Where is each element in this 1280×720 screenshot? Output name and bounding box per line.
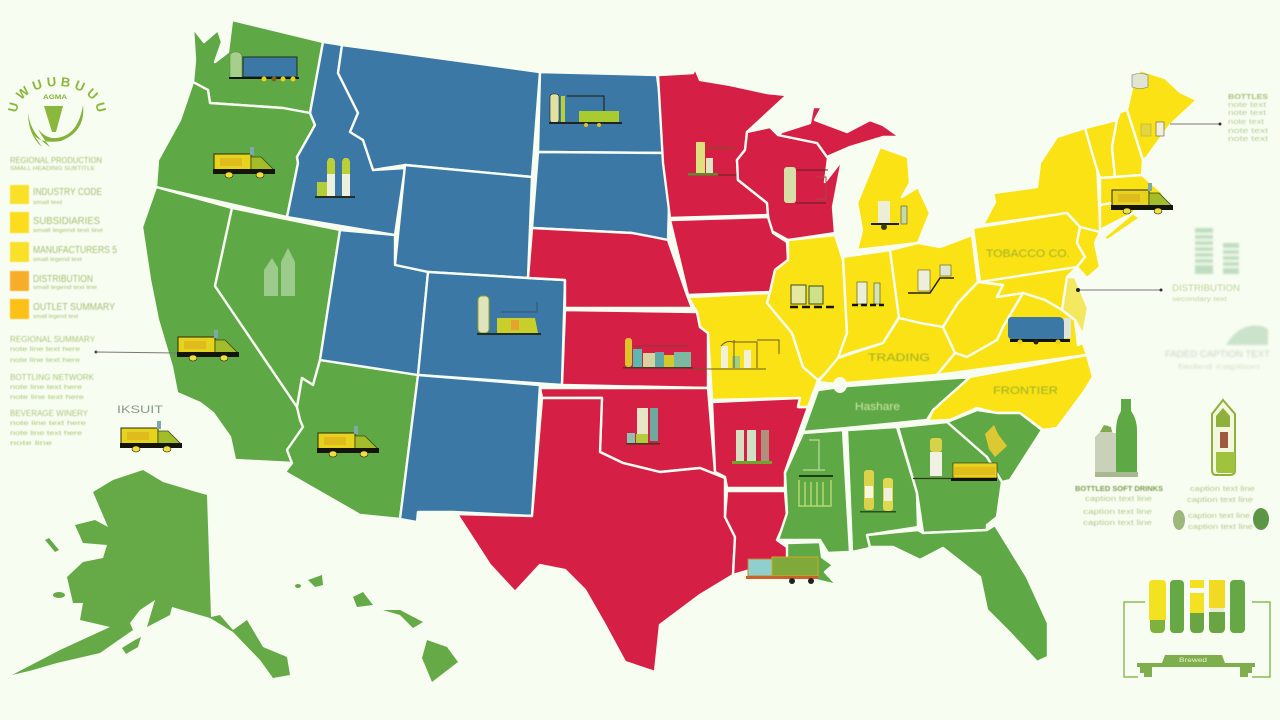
icon: seal left [1173,510,1185,530]
state labels [855,248,1070,413]
note 3: note line text here [10,420,87,427]
legend item 4 [10,271,97,291]
note 1: note line text here [10,346,81,353]
right callouts [1075,92,1271,677]
note 1 [10,334,95,364]
text block: Delaware: DISTRIBUTION [1172,283,1240,293]
text block: Maine: note text [1228,134,1269,143]
map: Hawaii islands [295,575,458,682]
map: contiguous states [142,20,1197,672]
note 1: REGIONAL SUMMARY [10,334,95,344]
logo [8,77,106,147]
legend item 2: SUBSIDIARIES [33,216,100,227]
legend item 2 [10,212,103,234]
logo arc text [17,86,97,113]
text block: bottle one: caption text line [1083,507,1152,516]
callout: Maine [1170,122,1222,126]
icon: Maine coast [1141,122,1164,136]
legend heading [10,155,102,172]
tanks: Arkansas [732,430,772,464]
truck: Washington [229,52,299,82]
legend heading: REGIONAL PRODUCTION [10,155,102,165]
legend [10,155,117,320]
icon: faded buildings [1195,228,1239,274]
icon: Maine plant [1132,74,1148,88]
legend item 1: small text [33,200,63,206]
legend item 3: small legend text [33,257,83,263]
icon: green bottle [1095,399,1138,477]
legend item 4: small legend text line [33,285,97,291]
note 3: note line [10,440,53,447]
chart: bottle bars [1124,580,1270,677]
text block: bottle two [1187,484,1255,531]
map: Alaska [12,470,290,678]
icon: Cairo knot [833,377,847,393]
legend item 5: OUTLET SUMMARY [33,302,115,313]
text block: bottle two: caption text line [1190,484,1255,493]
note 2 [10,372,94,401]
callout line: west [94,350,178,354]
legend item 3 [10,242,117,263]
icons: trucks [117,52,1173,584]
note 2: note line text here [10,394,85,401]
logo: UWUUBUUU [8,77,106,112]
icon: faded hill [1226,325,1268,345]
factory: Kansas [623,338,693,368]
truck: California [177,330,239,361]
text block: Maine: note text [1228,126,1269,135]
factory: Ohio [908,265,954,293]
truck: Gulf [746,557,818,584]
legend item 3: MANUFACTURERS 5 [33,245,117,256]
tanks: Michigan [871,201,907,230]
callout: Delaware [1076,288,1162,292]
label: North Carolina: FRONTIER [993,385,1058,397]
note 2: BOTTLING NETWORK [10,372,94,382]
left notes [10,334,95,447]
factory: Missouri [693,340,779,369]
bar 5 [1230,580,1245,633]
note 3: BEVERAGE WINERY [10,408,88,418]
factory: Illinois [790,285,838,307]
note 2: note line text here [10,384,83,391]
factory: North Dakota [549,94,622,127]
factory: Minnesota [688,142,736,176]
text block: bottle one: BOTTLED SOFT DRINKS [1075,484,1163,493]
legend item 5: small legend text [33,314,79,320]
text block: bottle two: caption text line [1187,495,1253,504]
legend heading: SMALL HEADING SUBTITLE [10,166,95,172]
factory: Colorado [477,296,541,335]
legend item 1: INDUSTRY CODE [33,187,102,198]
factory: Mississippi [799,440,833,506]
label: Tennessee: Hashare [855,401,900,413]
bottle: Georgia [930,438,942,476]
bottles: Alabama [860,470,896,512]
bar 2 [1170,580,1184,633]
truck: Georgia [913,463,997,481]
frame [1124,602,1270,677]
region: red central [457,68,900,672]
logo swoosh [28,105,83,147]
region: green south-east [778,377,1048,662]
legend item 2: small legend text line [33,228,103,234]
bar 4 [1209,580,1225,633]
tanks: Idaho [315,158,355,198]
truck label: IKSUIT [117,404,163,416]
region: green west [142,20,418,519]
text block: bottle two: caption text line [1188,511,1250,520]
tanks: Oklahoma [626,408,660,444]
text block: faded: FADED CAPTION TEXT [1165,349,1271,359]
text block: Maine [1228,92,1269,143]
note 1: note line text here [10,357,81,364]
legend item 1 [10,185,102,206]
text block: bottle one [1075,484,1163,527]
label: Pennsylvania: TOBACCO CO. [986,248,1070,260]
truck: New York [1111,183,1173,214]
icons: factories and bottles [264,74,1164,512]
bar 1 [1149,580,1166,633]
ribbon banner: Brewed [1179,658,1207,664]
label: Kentucky: TRADING [868,352,930,364]
factory: Wisconsin [784,167,828,203]
note 3: note line text here [10,430,83,437]
text block: Delaware [1172,283,1240,303]
icon: label bottle [1212,400,1235,475]
truck: Virginia [1008,317,1071,344]
truck: Oregon [213,147,275,178]
text block: Maine: note text [1228,100,1267,109]
text block: bottle one: caption text line [1083,518,1152,527]
bar 3 [1190,580,1204,633]
legend item 4: DISTRIBUTION [33,274,93,285]
icon: South Carolina plant [985,425,1007,457]
text block: Maine: BOTTLES [1228,92,1268,101]
legend item 5 [10,299,115,320]
note 3 [10,408,88,447]
region: yellow east [688,70,1197,430]
icon: seal right [1253,508,1269,530]
region: blue mountain [287,42,670,522]
ribbon banner [1137,655,1255,677]
logo stem [44,106,63,132]
text block: faded [1165,349,1271,371]
text block: faded: faded caption [1178,362,1260,371]
truck: Arizona [317,426,379,457]
text block: bottle two: caption text line [1188,522,1253,531]
text block: bottle one: caption text line [1085,494,1152,503]
icon: Nevada tanks [264,248,295,296]
factory: Indiana [852,282,884,305]
text block: Delaware: secondary text [1172,296,1227,303]
truck: offshore [120,421,182,452]
text block: Maine: note text [1228,108,1267,117]
logo small text: AGMA [43,95,68,101]
text block: Maine: note text [1228,117,1265,126]
